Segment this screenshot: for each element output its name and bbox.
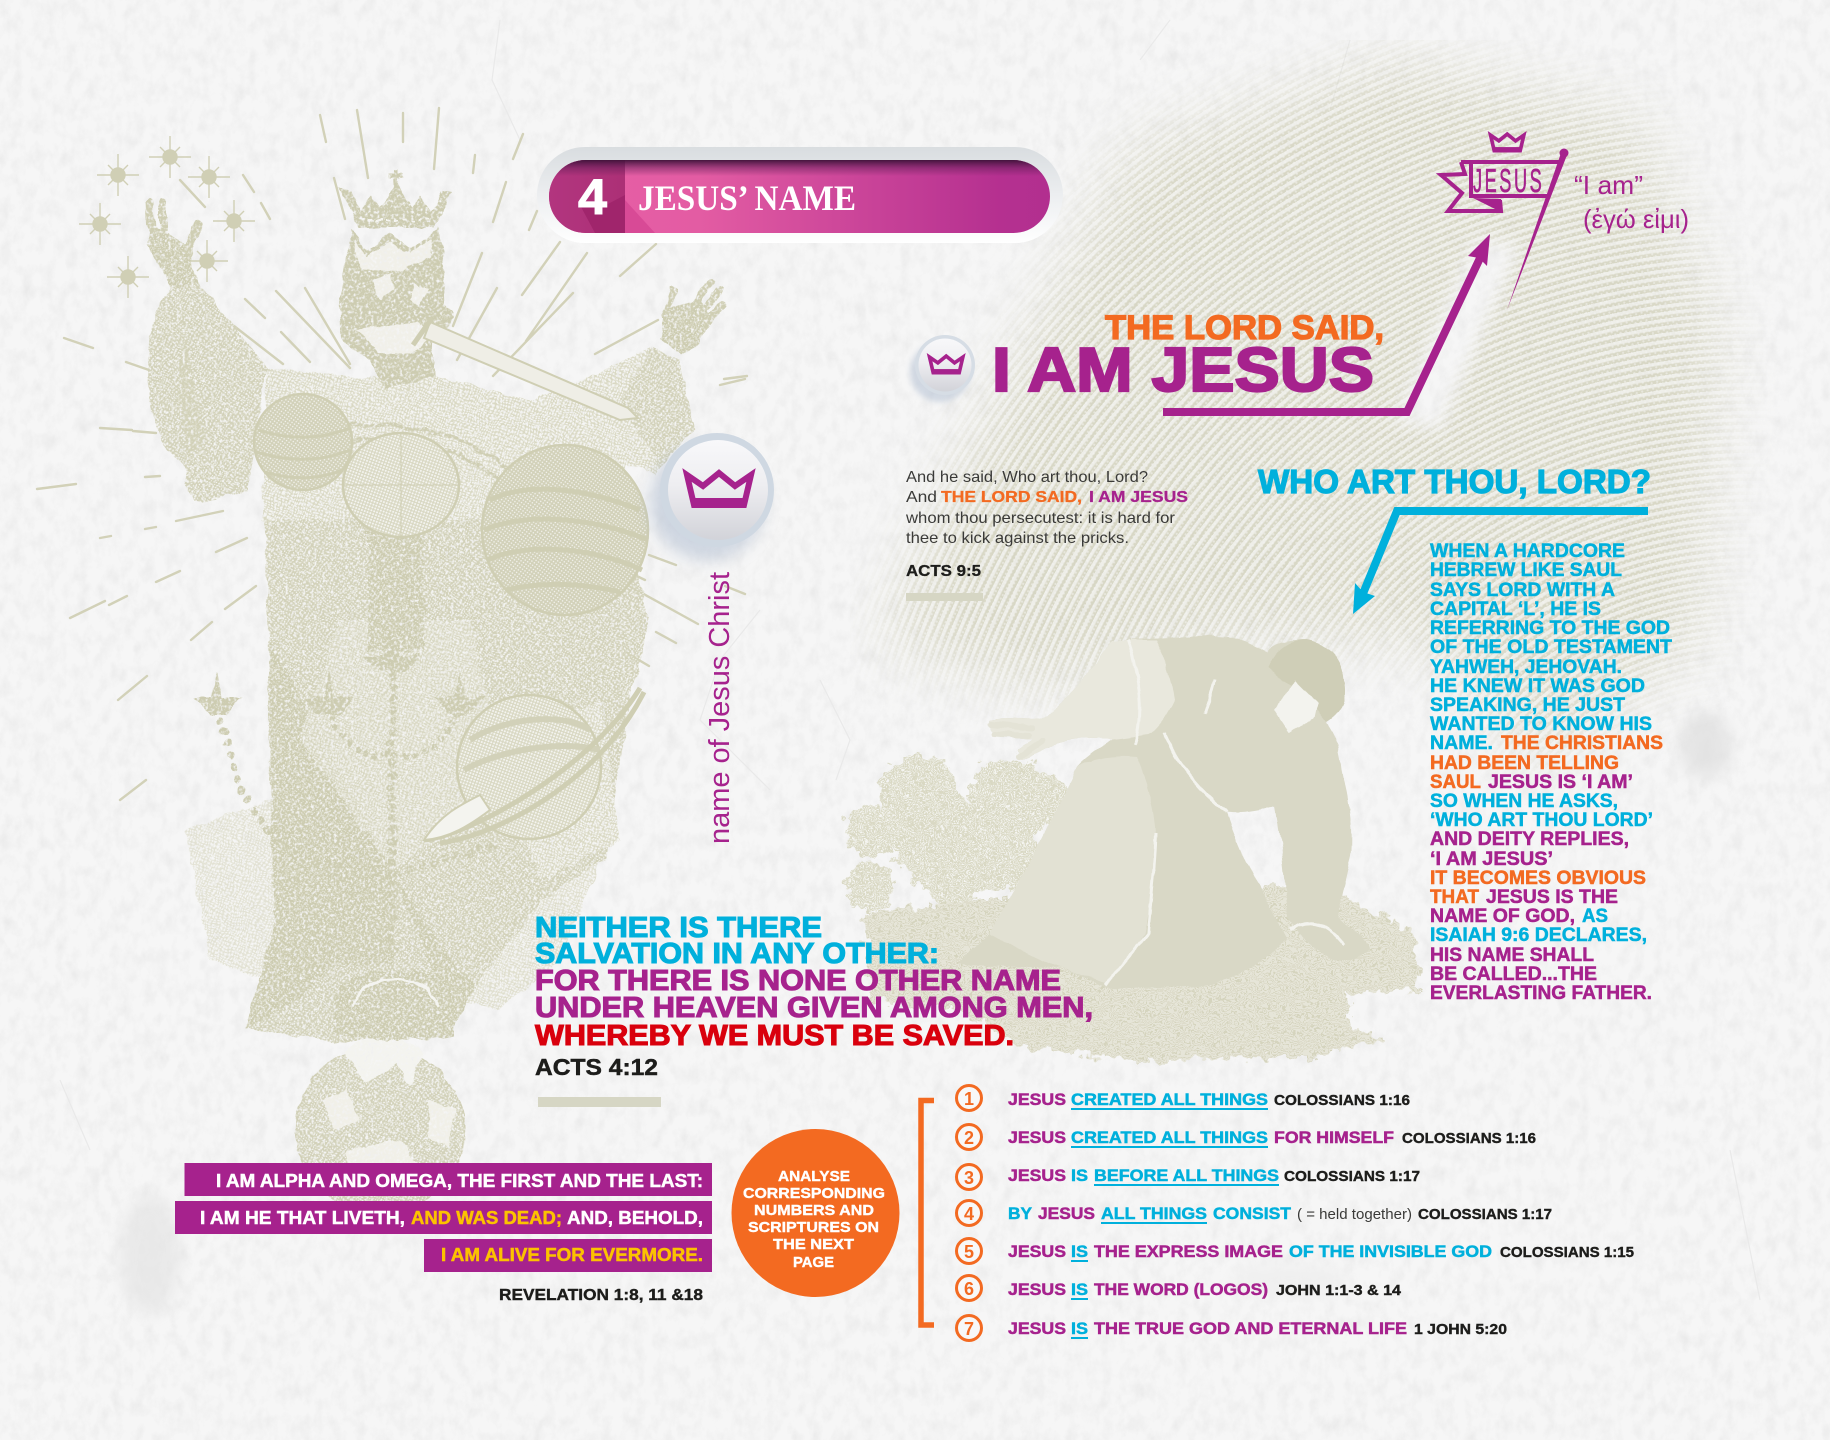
item 2 [956, 1124, 1536, 1150]
scripture: Acts 9:5: whom thou persecutest: it is hard for [905, 510, 1176, 527]
item 2: 2 [964, 1128, 974, 1148]
explanation text block: NAME. [1430, 733, 1493, 754]
crown icon [930, 356, 963, 374]
item 6: JESUS [1008, 1281, 1066, 1299]
item 7: IS [1071, 1320, 1088, 1338]
orange callout circle: NUMBERS AND [754, 1202, 874, 1219]
explanation text block: NAME OF GOD, [1430, 906, 1575, 927]
explanation text block: AND DEITY REPLIES, [1430, 829, 1629, 850]
item 7: 1 JOHN 5:20 [1414, 1322, 1507, 1338]
radiating rays [37, 108, 747, 800]
revelation bars: I AM ALPHA AND OMEGA, THE FIRST AND THE LAST: [216, 1170, 703, 1191]
scripture: Acts 4:12: NEITHER IS THERE [535, 912, 822, 944]
orange callout circle: ANALYSE [778, 1168, 850, 1185]
item 4: COLOSSIANS 1:17 [1418, 1207, 1552, 1223]
bush [845, 755, 1073, 911]
orange callout circle: SCRIPTURES ON [748, 1219, 879, 1236]
item 5: IS [1071, 1243, 1088, 1261]
central globe [343, 433, 459, 537]
explanation text block: SPEAKING, HE JUST [1430, 695, 1625, 716]
face highlights [355, 238, 432, 352]
item 7 [956, 1316, 1507, 1340]
candelabrum bowls [193, 625, 484, 714]
item 6: THE WORD (LOGOS) [1094, 1281, 1268, 1299]
item 1 [956, 1086, 1410, 1110]
revelation bars: AND WAS DEAD; [411, 1207, 562, 1228]
numbered list [956, 1086, 1634, 1340]
item 4: ( = held together) [1297, 1207, 1412, 1223]
section banner [537, 147, 1063, 243]
item 6: 6 [964, 1279, 974, 1299]
scripture: Acts 9:5: And [906, 489, 937, 506]
I am greek caption: “I am” [1574, 170, 1643, 200]
explanation text block: REFERRING TO THE GOD [1430, 618, 1670, 639]
left sleeve [148, 284, 267, 502]
explanation text block: ‘WHO ART THOU LORD’ [1430, 810, 1653, 831]
explanation text block: ‘I AM JESUS’ [1430, 849, 1553, 870]
planet saturn [424, 688, 644, 843]
planet jupiter left [254, 394, 352, 490]
heading: the lord said: THE LORD SAID, [1105, 309, 1384, 347]
scripture: Acts 4:12: ACTS 4:12 [535, 1054, 658, 1080]
flag name: JESUS [1473, 162, 1542, 199]
heading: the lord said [992, 309, 1384, 405]
item 7: THE TRUE GOD AND ETERNAL LIFE [1094, 1320, 1407, 1338]
banner outer ring [537, 147, 1063, 243]
scripture: Acts 9:5: I AM JESUS [1089, 489, 1188, 506]
explanation text block: JESUS IS THE [1486, 887, 1618, 908]
shoulders and right sleeve [262, 349, 694, 520]
I am greek caption: (ἐγώ εἰμι) [1583, 204, 1689, 234]
sword [413, 318, 638, 420]
revelation bars: AND, BEHOLD, [567, 1207, 703, 1228]
crown icon [687, 473, 751, 507]
explanation text block: YAHWEH, JEHOVAH. [1430, 657, 1622, 678]
item 3: 3 [964, 1168, 974, 1188]
explanation text block: SAUL [1430, 772, 1481, 793]
right hand [660, 282, 722, 353]
scripture: Acts 9:5: And he said, Who art thou, Lord? [906, 469, 1148, 486]
explanation text block: THE CHRISTIANS [1501, 733, 1663, 754]
arrow: cyan down to Saul [1353, 511, 1648, 614]
scripture: Acts 4:12: WHEREBY WE MUST BE SAVED. [535, 1020, 1014, 1052]
flag with Jesus [1441, 134, 1568, 310]
explanation text block: IT BECOMES OBVIOUS [1430, 868, 1646, 889]
explanation text block: JESUS IS ‘I AM’ [1488, 772, 1633, 793]
explanation text block: HAD BEEN TELLING [1430, 753, 1619, 774]
ground [863, 883, 1421, 1060]
Saul fingers [990, 724, 1042, 757]
Saul figure [958, 636, 1370, 989]
I am greek caption [1574, 170, 1689, 234]
item 1: COLOSSIANS 1:16 [1274, 1093, 1410, 1109]
heading: I am Jesus: I AM JESUS [992, 336, 1374, 405]
small crown button [910, 335, 975, 402]
explanation text block: AS [1582, 906, 1608, 927]
item 5: JESUS [1008, 1243, 1066, 1261]
number 4: 4 [578, 169, 607, 225]
left hand [146, 202, 200, 288]
explanation text block [1430, 541, 1672, 1004]
item 4 [956, 1200, 1552, 1226]
orange callout circle: THE NEXT [773, 1236, 854, 1253]
planet jupiter large [482, 445, 648, 615]
item 5: THE EXPRESS IMAGE [1094, 1243, 1283, 1261]
world globe [296, 1040, 464, 1214]
item 3 [956, 1164, 1420, 1190]
flag crown [1491, 134, 1524, 152]
item 2: FOR HIMSELF [1274, 1129, 1394, 1147]
item 2: CREATED ALL THINGS [1071, 1129, 1268, 1147]
item 7: JESUS [1008, 1320, 1066, 1338]
Saul body [958, 636, 1370, 989]
explanation text block: HIS NAME SHALL [1430, 945, 1594, 966]
Saul face [1275, 680, 1318, 733]
revelation bars: I AM ALIVE FOR EVERMORE. [441, 1244, 703, 1265]
engraved ripple texture [850, 40, 1780, 800]
banner body [549, 160, 1050, 233]
item 2: JESUS [1008, 1129, 1066, 1147]
item 5: COLOSSIANS 1:15 [1500, 1245, 1634, 1261]
number tab [549, 160, 1050, 233]
ribbon [1441, 162, 1561, 211]
item 5: 5 [964, 1242, 974, 1262]
bracket [921, 1100, 934, 1325]
Saul arm highlight [988, 640, 1175, 760]
large crown button [650, 433, 774, 560]
explanation text block: BE CALLED...THE [1430, 964, 1597, 985]
orange callout circle: CORRESPONDING [743, 1185, 885, 1202]
item 4: 4 [964, 1204, 974, 1224]
robe fold highlights [1105, 640, 1345, 985]
scripture: Acts 4:12: FOR THERE IS NONE OTHER NAME [535, 965, 1061, 997]
arrow: purple up to flag [1163, 234, 1490, 412]
revelation bars [175, 1163, 712, 1304]
explanation text block: CAPITAL ‘L’, HE IS [1430, 599, 1601, 620]
scripture: Acts 9:5: ACTS 9:5 [906, 563, 981, 580]
explanation text block: WANTED TO KNOW HIS [1430, 714, 1652, 735]
scripture: Acts 4:12 [535, 912, 1093, 1107]
explanation text block: WHEN A HARDCORE [1430, 541, 1625, 562]
item 3: JESUS [1008, 1167, 1066, 1185]
item 5 [956, 1238, 1634, 1264]
candelabrum chains [217, 665, 501, 960]
scripture: Acts 9:5 [905, 469, 1188, 601]
Saul robe highlight [990, 756, 1156, 983]
item 6: IS [1071, 1281, 1088, 1299]
belt dome [334, 970, 453, 1040]
chest band arcs [275, 425, 520, 490]
explanation text block: ISAIAH 9:6 DECLARES, [1430, 925, 1647, 946]
explanation text block: SAYS LORD WITH A [1430, 580, 1615, 601]
illustration: crowned king figure [37, 108, 747, 1214]
item 7: 7 [964, 1319, 974, 1339]
explanation text block: THAT [1430, 887, 1479, 908]
vertical label: name of Jesus Christ [704, 572, 736, 844]
orange callout circle [732, 1129, 900, 1297]
item 4: ALL THINGS [1101, 1205, 1207, 1223]
orange callout circle: PAGE [793, 1254, 834, 1271]
Saul hair [1268, 640, 1345, 723]
figure body shapes [146, 170, 722, 1214]
item 4: CONSIST [1213, 1205, 1291, 1223]
scripture: Acts 9:5: THE LORD SAID, [941, 489, 1082, 506]
item 3: COLOSSIANS 1:17 [1284, 1169, 1420, 1185]
item 4: JESUS [1038, 1205, 1095, 1223]
flag pole [1507, 153, 1567, 310]
revelation bars: REVELATION 1:8, 11 &18 [499, 1287, 703, 1304]
revelation bars: I AM HE THAT LIVETH, [200, 1207, 405, 1228]
scripture: Acts 4:12: SALVATION IN ANY OTHER: [535, 938, 939, 970]
hair and beard [339, 228, 453, 389]
scripture: Acts 9:5: thee to kick against the pricks. [906, 530, 1129, 547]
heading: who art thou: WHO ART THOU, LORD? [1258, 463, 1651, 500]
scripture: Acts 4:12: UNDER HEAVEN GIVEN AMONG MEN, [535, 992, 1093, 1024]
king crown [339, 170, 453, 228]
item 3: IS [1071, 1167, 1088, 1185]
faded hatch smudges [185, 800, 280, 985]
explanation text block: SO WHEN HE ASKS, [1430, 791, 1618, 812]
item 5: OF THE INVISIBLE GOD [1289, 1243, 1492, 1261]
item 6 [956, 1276, 1401, 1300]
item 6: JOHN 1:1-3 & 14 [1276, 1283, 1401, 1299]
explanation text block: HEBREW LIKE SAUL [1430, 560, 1622, 581]
item 4: BY [1008, 1205, 1032, 1223]
stars [79, 136, 255, 298]
item 1: 1 [964, 1089, 974, 1109]
item 3: BEFORE ALL THINGS [1094, 1167, 1279, 1185]
item 1: JESUS [1008, 1091, 1066, 1109]
robe [245, 440, 650, 1042]
item 1: CREATED ALL THINGS [1071, 1091, 1268, 1109]
item 2: COLOSSIANS 1:16 [1402, 1131, 1536, 1147]
explanation text block: EVERLASTING FATHER. [1430, 983, 1652, 1004]
explanation text block: OF THE OLD TESTAMENT [1430, 637, 1672, 658]
explanation text block: HE KNEW IT WAS GOD [1430, 676, 1645, 697]
banner title: JESUS’ NAME [638, 178, 856, 218]
illustration: Saul fallen on the ground [845, 636, 1421, 1060]
